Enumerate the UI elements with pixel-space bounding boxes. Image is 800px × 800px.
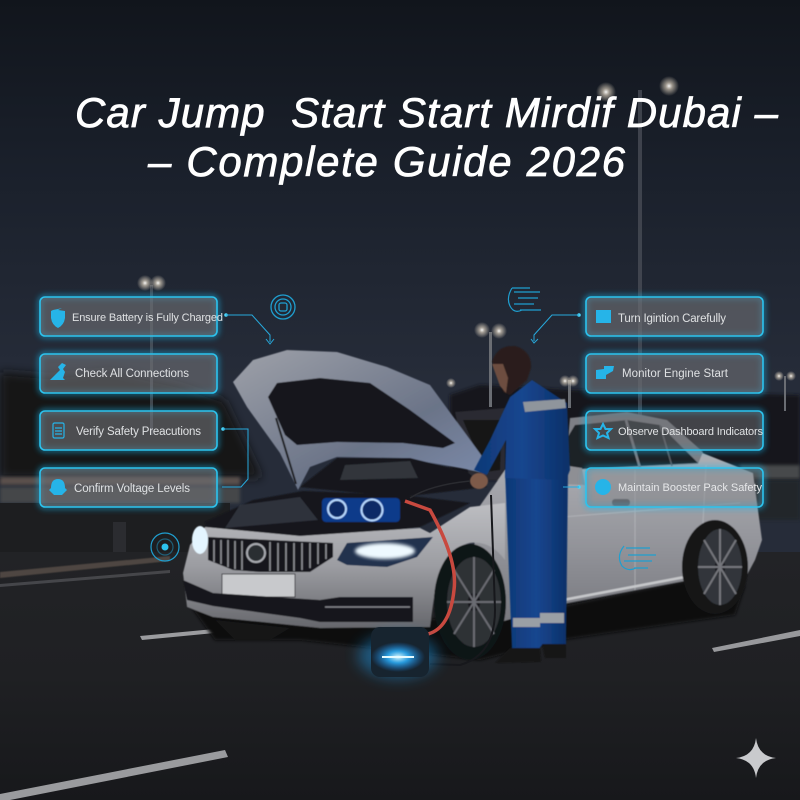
panel: Turn Ignition Carefully: [586, 297, 763, 336]
panel: Confirm Voltage Levels: [40, 468, 217, 507]
car: [183, 350, 762, 660]
license plate: [222, 574, 295, 597]
door lines and handle: [562, 465, 740, 590]
icon: sparkle watermark: [736, 738, 776, 778]
background: street lamps: [137, 76, 796, 435]
person: [470, 346, 570, 663]
connector: booster safety panel: [563, 485, 581, 489]
title: Car Jump Start Start Mirdif Dubai –: [75, 89, 779, 136]
icon: target bottom left: [151, 533, 179, 561]
icon: gear badge: [595, 479, 611, 495]
panel: Observe Dashboard Indicators: [586, 411, 764, 450]
cables: [405, 481, 495, 665]
icon: ignition: [596, 310, 611, 323]
title: [75, 89, 779, 185]
title: – Complete Guide 2026: [147, 138, 626, 185]
car roof behind hood: [455, 408, 505, 480]
engine bay: [205, 491, 470, 537]
panel: Maintain Booster Pack Safety: Maintain Booster Pack Safety: [618, 482, 762, 494]
car roof: [565, 412, 703, 470]
background: night sky: [0, 0, 800, 560]
icon: shield: [51, 307, 65, 328]
car windows: [563, 420, 698, 470]
car shadow: [190, 578, 745, 660]
headlight right: [337, 537, 433, 567]
panel: Maintain Booster Pack Safety: [586, 468, 763, 507]
arrow: ignition panel to car: [531, 313, 581, 343]
icon: helmet: [49, 479, 67, 495]
torso and arm: [474, 380, 570, 480]
car rear body: [470, 452, 762, 625]
background: trees and highway barrier: [0, 370, 800, 553]
panel: Check All Connections: Check All Connections: [75, 368, 189, 380]
booster pack: [358, 627, 438, 678]
lower bumper: [183, 580, 413, 622]
rear wheel: [682, 520, 748, 614]
icon: wrench: [50, 363, 66, 380]
panel: Turn Ignition Carefully: Turn Igintion Carefully: [618, 313, 726, 325]
icon: circuit top: [508, 288, 541, 311]
icon: clipboard: [53, 423, 64, 438]
panel: Ensure Battery is Fully Charged: Ensure Battery is Fully Charged: [72, 312, 223, 324]
panel glow layer: [40, 297, 763, 507]
logo: [247, 544, 265, 562]
hood inner: [268, 378, 455, 448]
panel: Verify Safety Preacutions: [40, 411, 217, 450]
boots: [495, 648, 541, 663]
mirror: [562, 465, 585, 485]
panel: Observe Dashboard Indicators: Observe Dashboard Indicators: [618, 426, 764, 438]
legs: [505, 470, 568, 650]
road: [0, 552, 800, 800]
icon: engine: [596, 366, 614, 379]
hood strut: [276, 418, 296, 484]
dashboard gauges in engine bay: [322, 498, 400, 522]
panel: Verify Safety Preacutions: Verify Safety Preacutions: [76, 426, 201, 438]
car front body: [183, 503, 505, 628]
reflective stripes: [523, 399, 566, 412]
front wheel: [434, 544, 506, 660]
windshield under hood: [300, 458, 487, 497]
head: [492, 346, 531, 395]
hand: [470, 473, 488, 489]
icon: star: [595, 424, 611, 438]
panel: Confirm Voltage Levels: Confirm Voltage Levels: [74, 483, 190, 495]
icon: circuit bottom: [619, 546, 656, 570]
headlight left: [192, 526, 208, 554]
panel: Ensure Battery is Fully Charged: [40, 297, 223, 336]
panel: Monitor Engine Start: Monitor Engine Start: [622, 368, 729, 380]
panel: Check All Connections: [40, 354, 217, 393]
grille: [208, 537, 333, 572]
panel: Monitor Engine Start: [586, 354, 763, 393]
open hood: [233, 350, 487, 490]
icon: target top left: [271, 295, 295, 319]
arrow: battery panel to car: [224, 313, 274, 344]
connector: voltage and safety panels: [221, 427, 248, 487]
